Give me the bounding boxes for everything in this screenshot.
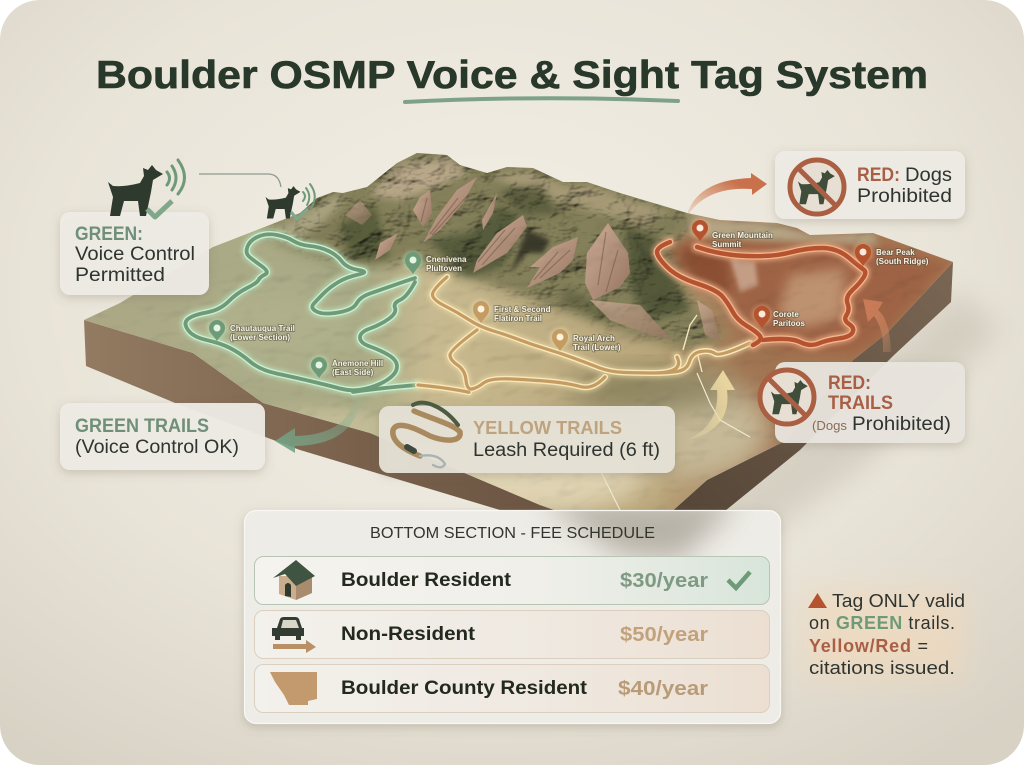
connector line between dog icons: [199, 174, 281, 187]
trail pin: Chautauqua Trail: Chautauqua Trail: [230, 324, 295, 333]
flatiron rock faces: [345, 177, 720, 340]
callout: tag warning: Yellow/Red =: [809, 636, 928, 656]
icon: check: [728, 572, 750, 588]
trail pin: third green: Plultoven: [426, 264, 462, 273]
pale track lines: [600, 373, 750, 510]
panel: green voice control: [60, 212, 209, 295]
panel: green trails: (Voice Control OK): [75, 437, 239, 458]
panel: red trails: Prohibited): [852, 414, 951, 435]
fee row: Boulder County Resident: [254, 664, 770, 712]
trail pin: Royal Arch: Royal Arch: [573, 334, 615, 343]
trail pin: Royal Arch: [550, 328, 621, 352]
icon: small dog with voice waves: [266, 184, 315, 219]
panel: green voice control: Voice Control: [75, 244, 195, 265]
panel: red dogs prohibited: RED:: [857, 165, 900, 186]
red zone shading: [655, 232, 950, 355]
panel: green voice control: GREEN:: [75, 224, 143, 245]
trail pin: Royal Arch: Trail (Lower): [573, 343, 621, 352]
trail pin: First & Second Flatiron: [471, 300, 551, 323]
trail pin: Green Mountain Summit: Summit: [712, 240, 742, 249]
green trails: [186, 234, 418, 392]
panel: fee schedule: [244, 500, 781, 724]
terrain front-right side: [640, 262, 953, 570]
trail pin: Bear Peak: [853, 243, 929, 266]
trail pin: Anemone Hill: [309, 356, 383, 378]
fee row: Non-Resident: [254, 610, 770, 658]
panel: yellow trails: [379, 403, 675, 473]
terrain top surface: [84, 153, 953, 510]
trail pin: Bear Peak: (South Ridge): [876, 257, 929, 266]
callout: tag warning: [805, 590, 965, 680]
panel: red trails: [760, 362, 965, 443]
panel: red trails: TRAILS: [828, 393, 893, 414]
title: Boulder OSMP Voice & Sight Tag System: [96, 54, 928, 97]
icon: large dog with voice waves: [108, 160, 184, 217]
icon: no dogs: [760, 370, 814, 424]
panel: red trails: (Dogs: [812, 418, 847, 433]
callout: tag warning: on GREEN trails.: [809, 613, 955, 633]
trail pin: Chautauqua Trail: (Lower Section): [230, 333, 290, 342]
red trails: [657, 242, 865, 345]
panel: green trails: GREEN TRAILS: [75, 416, 209, 437]
trail pin: Corote Paritoos: [752, 305, 806, 328]
trail pin: Anemone Hill: (East Side): [332, 368, 374, 377]
callout: tag warning: citations issued.: [809, 658, 955, 678]
title underline: [405, 98, 678, 102]
fee heading: BOTTOM SECTION - FEE SCHEDULE: [370, 525, 655, 542]
icon: county shape: [270, 672, 317, 705]
arrow: red dogs prohibited: [686, 173, 767, 218]
terrain front-left side: [84, 320, 640, 570]
panel: yellow trails: Leash Required (6 ft): [473, 440, 660, 461]
trail pin: third green: Cnenivena: [426, 255, 467, 264]
fee row: Non-Resident: $50/year: [620, 624, 708, 646]
panel: red trails: RED:: [828, 373, 871, 394]
trail pin: Chautauqua Trail: [207, 319, 295, 342]
mountain mass: [263, 153, 724, 354]
fee row: Boulder Resident: $30/year: [620, 570, 708, 592]
terrain map: [84, 153, 995, 529]
fee row: Boulder Resident: Boulder Resident: [341, 570, 512, 591]
trail pin: Corote Paritoos: Paritoos: [773, 319, 806, 328]
fee row: Non-Resident: Non-Resident: [341, 624, 476, 645]
trail pin: third green: [403, 251, 467, 274]
panel: yellow trails: YELLOW TRAILS: [473, 418, 622, 438]
arrow: green trails callout: [275, 400, 360, 453]
arrow: yellow trails callout: [687, 370, 735, 440]
callout: tag warning: Tag ONLY valid: [832, 591, 965, 611]
panel: green voice control: Permitted: [75, 265, 165, 286]
icon: leash: [393, 403, 460, 467]
trail pin: First & Second Flatiron: First & Second: [494, 305, 551, 314]
trail pin: Bear Peak: Bear Peak: [876, 248, 915, 257]
panel: red dogs prohibited: Prohibited: [857, 186, 952, 207]
panel: red dogs prohibited: Dogs: [905, 165, 952, 186]
icon: warning triangle: [808, 593, 827, 608]
rock striations: [421, 195, 618, 292]
ground relief texture: [149, 162, 914, 496]
arrow: red trails callout: [863, 299, 891, 352]
trail pin: Anemone Hill: Anemone Hill: [332, 359, 383, 368]
panel: green trails: [60, 403, 265, 470]
fee row: Boulder Resident: [254, 556, 770, 604]
trail pin: Corote Paritoos: Corote: [773, 310, 799, 319]
fee row: Boulder County Resident: $40/year: [618, 678, 708, 700]
icon: no dogs: [790, 160, 844, 214]
icon: house: [273, 560, 315, 600]
panel: red dogs prohibited: [775, 151, 965, 219]
icon: car: [272, 617, 316, 653]
trail pin: Green Mountain Summit: [690, 219, 773, 249]
trail pin: First & Second Flatiron: Flatiron Trail: [494, 314, 542, 323]
yellow trails: [418, 277, 750, 392]
fee row: Boulder County Resident: Boulder County Resident: [341, 678, 588, 699]
trail pin: Green Mountain Summit: Green Mountain: [712, 231, 773, 240]
